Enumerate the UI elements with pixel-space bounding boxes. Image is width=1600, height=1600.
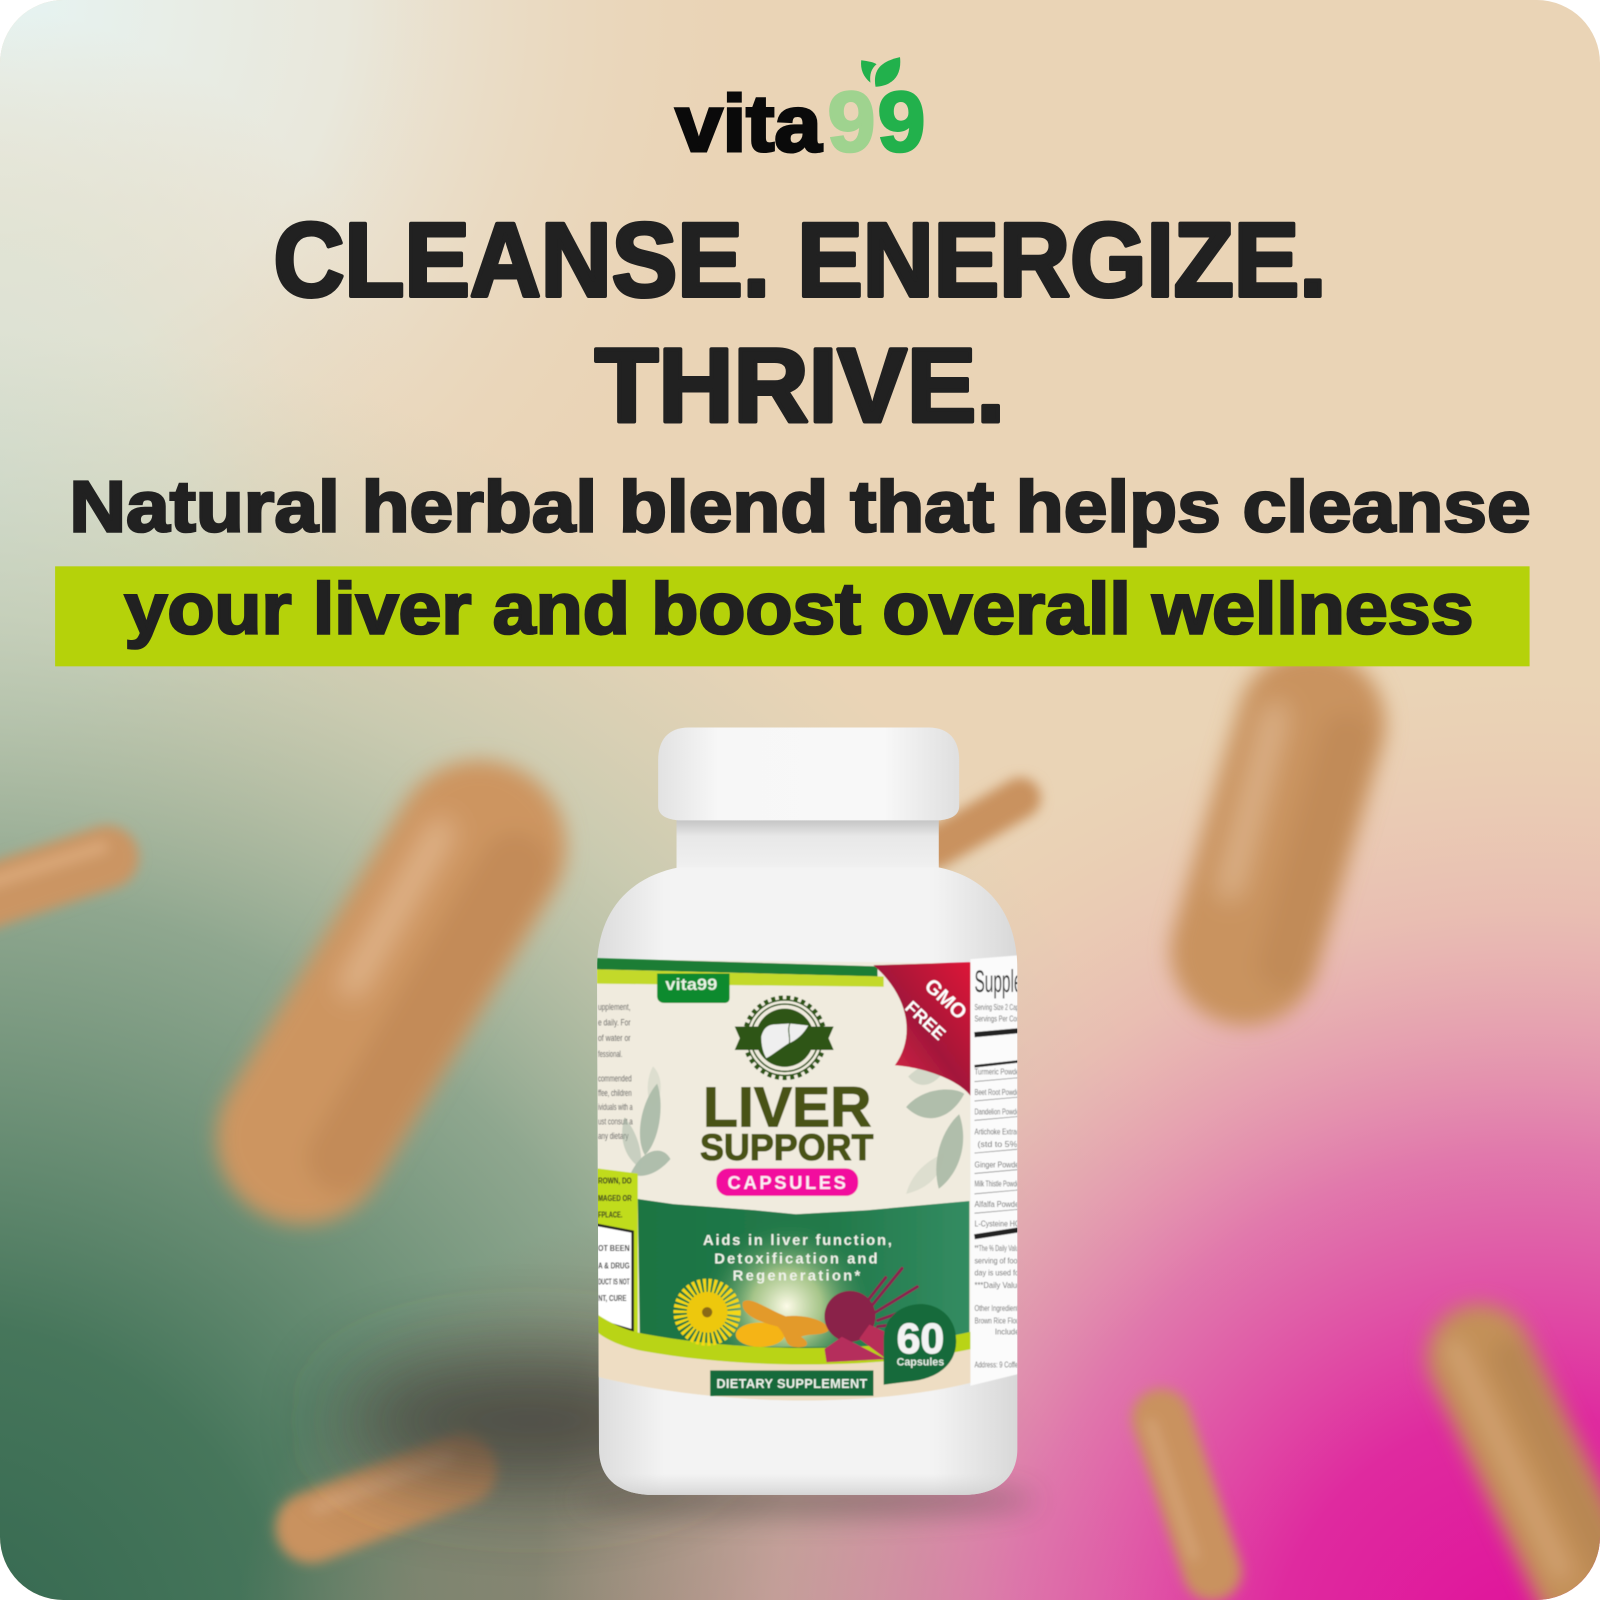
supplement facts panel: Brown Rice Flour [974, 1316, 1022, 1325]
logo digit dark 9: 9 [878, 74, 926, 170]
left directions text: ividuals with a [598, 1102, 633, 1112]
supplement facts panel: Other Ingredients [974, 1304, 1021, 1313]
left notice box: A & DRUG [598, 1261, 630, 1270]
highlighted subheading [55, 566, 1530, 666]
liver badge [735, 997, 834, 1078]
vita99 label tab: vita99 [665, 976, 717, 994]
left directions text: ffee, children [598, 1088, 632, 1098]
left notice box: DUCT IS NOT [598, 1278, 630, 1287]
left directions text [598, 1002, 633, 1141]
dietary supplement tag [710, 1370, 873, 1396]
bottle cast shadow [342, 1357, 1036, 1516]
blurred capsule: bottom right [1454, 1347, 1600, 1592]
left sprig leaves [622, 1066, 670, 1176]
left notice box: NT, CURE [598, 1294, 627, 1303]
left lime warning panel: FPLACE. [598, 1210, 622, 1219]
product name SUPPORT: SUPPORT [700, 1127, 874, 1168]
logo digit light 9: 9 [828, 74, 876, 170]
left directions text: ust consult a [598, 1116, 633, 1126]
product name LIVER: LIVER [703, 1076, 871, 1139]
ingredient: dandelion [684, 1289, 731, 1336]
supplement facts panel [970, 955, 1022, 1386]
blurred capsule: far left [0, 847, 107, 903]
supplement facts panel: Turmeric Powder [974, 1067, 1022, 1076]
logo wordmark vita: vita [676, 79, 822, 168]
product name [700, 1076, 874, 1168]
supplement facts panel: Serving Size 2 Caps [974, 1003, 1021, 1012]
capsules pill: CAPSULES [728, 1172, 846, 1193]
blurred capsule: behind bottle [934, 798, 1020, 849]
right sprig leaves [906, 1064, 964, 1194]
supplement facts panel: Address: 9 Coffee [974, 1360, 1022, 1369]
left directions text: of water or [598, 1033, 631, 1043]
logo: vita99 [674, 57, 924, 154]
logo leaves [861, 57, 900, 87]
supplement facts panel: Servings Per Cont [974, 1014, 1022, 1023]
left lime warning panel: MAGED OR [598, 1194, 632, 1203]
subheading line: Natural herbal blend that helps cleanse [69, 467, 1531, 548]
label cream base [597, 959, 971, 1400]
left directions text: fessional. [598, 1049, 622, 1059]
left notice box: OT BEEN [598, 1244, 630, 1253]
supplement facts panel: Ginger Powder [974, 1160, 1022, 1169]
headline line 1: CLEANSE. ENERGIZE. [273, 202, 1327, 319]
supplement facts panel: Alfalfa Powder [974, 1200, 1022, 1209]
blurred capsule: bottom left [311, 1457, 461, 1528]
supplement facts panel: ***Daily Value [974, 1281, 1022, 1290]
claim text: Detoxification and [714, 1251, 878, 1267]
ingredient: beetroot [824, 1268, 918, 1362]
claim text: Aids in liver function, [703, 1233, 892, 1249]
left lime warning panel: ROWN, DO [598, 1177, 632, 1186]
left directions text: upplement, [598, 1002, 631, 1012]
product bottle [595, 728, 1022, 1495]
GMO free ribbon: GMO [920, 975, 971, 1024]
supplement facts panel: serving of food [974, 1256, 1022, 1265]
supplement facts panel: day is used for [974, 1269, 1022, 1278]
GMO free ribbon: FREE [901, 997, 950, 1044]
vita99 label tab [657, 973, 730, 1003]
60 capsules badge: 60 [897, 1315, 944, 1363]
supplement facts panel: **The % Daily Value [974, 1244, 1022, 1253]
label top stripes [597, 958, 884, 987]
bottle neck [677, 816, 939, 884]
left notice box [595, 1224, 633, 1331]
highlighted subheading: your liver and boost overall wellness [124, 569, 1473, 650]
bottle body [597, 867, 1017, 1495]
supplement facts panel: Milk Thistle Powder [974, 1180, 1022, 1189]
dietary supplement tag: DIETARY SUPPLEMENT [716, 1376, 868, 1391]
lime curved band [597, 1314, 971, 1365]
supplement facts panel: Artichoke Extract [974, 1128, 1022, 1137]
bottle lower shading [599, 1388, 1017, 1495]
left directions text: any dietary [598, 1131, 629, 1141]
supplement facts panel: Include [995, 1328, 1020, 1337]
GMO free ribbon [873, 962, 971, 1097]
ingredient: turmeric [736, 1300, 830, 1347]
bottle label [595, 955, 1022, 1400]
claim text [703, 1233, 892, 1285]
infographic canvas: Supple [974, 963, 1022, 999]
headline [276, 220, 1322, 424]
green claim band [638, 1199, 969, 1348]
left lime warning panel [597, 1168, 638, 1345]
60 capsules badge: Capsules [897, 1356, 944, 1368]
supplement facts panel: Dandelion Powder [974, 1107, 1022, 1116]
blurred capsule: bottom centre right [1151, 1418, 1212, 1571]
claim text: Regeneration* [733, 1269, 860, 1285]
blurred capsule: large left [303, 832, 515, 1158]
capsules pill [716, 1168, 858, 1196]
60 capsules badge [884, 1304, 956, 1385]
bottle cap [658, 728, 959, 820]
supplement facts panel: Beet Root Powder [974, 1088, 1022, 1097]
left directions text: e daily. For [598, 1018, 631, 1028]
supplement facts panel: L-Cysteine HCl [974, 1220, 1022, 1229]
headline line 2: THRIVE. [595, 327, 1005, 444]
left directions text: commended [598, 1074, 632, 1084]
label lower cream band [597, 1327, 971, 1400]
blurred capsule: upper right [1230, 714, 1347, 964]
supplement facts panel: (std to 5%) [978, 1140, 1021, 1149]
